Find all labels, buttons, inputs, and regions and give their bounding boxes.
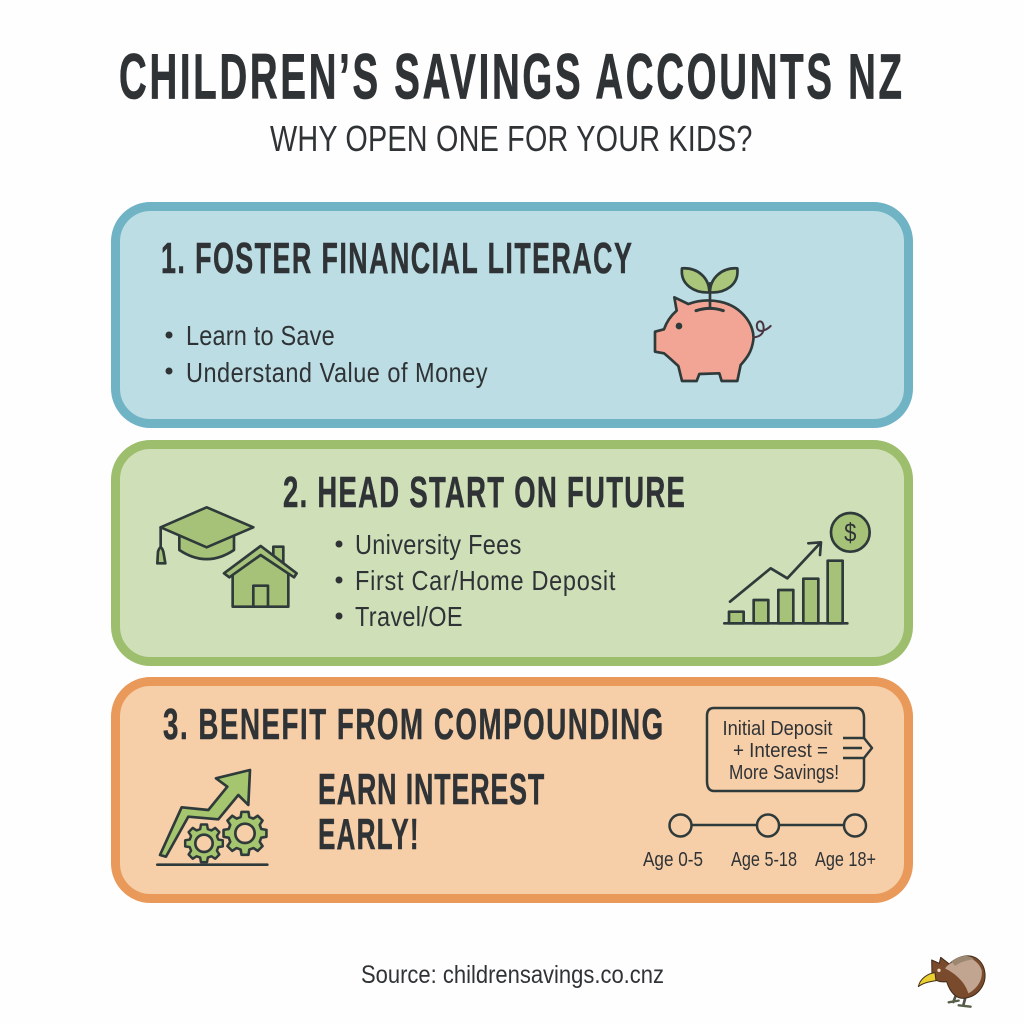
title: CHILDREN’S SAVINGS ACCOUNTS NZ [119, 42, 902, 113]
bullet list: section 2: Travel/OE [355, 602, 463, 632]
heading: section 1: 1. FOSTER FINANCIAL LITERACY [161, 233, 632, 283]
icon: graduation cap and house [157, 507, 297, 607]
callout box: initial deposit plus interest: Initial Deposit [722, 718, 833, 740]
icon: rising arrow with gears [157, 770, 267, 865]
bullet list: section 2: First Car/Home Deposit [355, 566, 615, 596]
timeline: age stages [643, 814, 876, 871]
icon: growth bar chart with dollar coin: $ [844, 519, 857, 548]
panel: head start on future [116, 444, 908, 662]
heading: section 3: 3. BENEFIT FROM COMPOUNDING [163, 700, 663, 749]
timeline: age stages: Age 18+ [815, 849, 876, 871]
timeline: age stages: Age 0-5 [643, 849, 703, 871]
callout text: earn interest early [318, 764, 544, 859]
bullet list: section 2: University Fees [355, 530, 521, 560]
bullet list: section 1: Learn to Save [186, 321, 335, 351]
callout text: earn interest early: EARLY! [318, 809, 419, 859]
callout box: initial deposit plus interest [707, 708, 872, 791]
timeline: age stages: Age 5-18 [731, 849, 797, 871]
heading: section 2: 2. HEAD START ON FUTURE [283, 467, 685, 517]
icon: piggy bank with sprout [655, 268, 771, 381]
callout box: initial deposit plus interest: More Savings! [729, 762, 839, 784]
panel: benefit from compounding [116, 682, 908, 898]
icon: growth bar chart with dollar coin [724, 513, 870, 623]
callout box: initial deposit plus interest: + Interest = [733, 740, 828, 762]
callout text: earn interest early: EARN INTEREST [318, 764, 544, 814]
source line: Source: childrensavings.co.cnz [361, 961, 664, 989]
icon: kiwi bird [918, 956, 985, 1007]
subtitle: WHY OPEN ONE FOR YOUR KIDS? [270, 118, 752, 159]
bullet list: section 2 [336, 530, 615, 632]
bullet list: section 1: Understand Value of Money [186, 358, 488, 388]
panel: foster financial literacy [116, 206, 908, 424]
bullet list: section 1 [166, 321, 488, 388]
